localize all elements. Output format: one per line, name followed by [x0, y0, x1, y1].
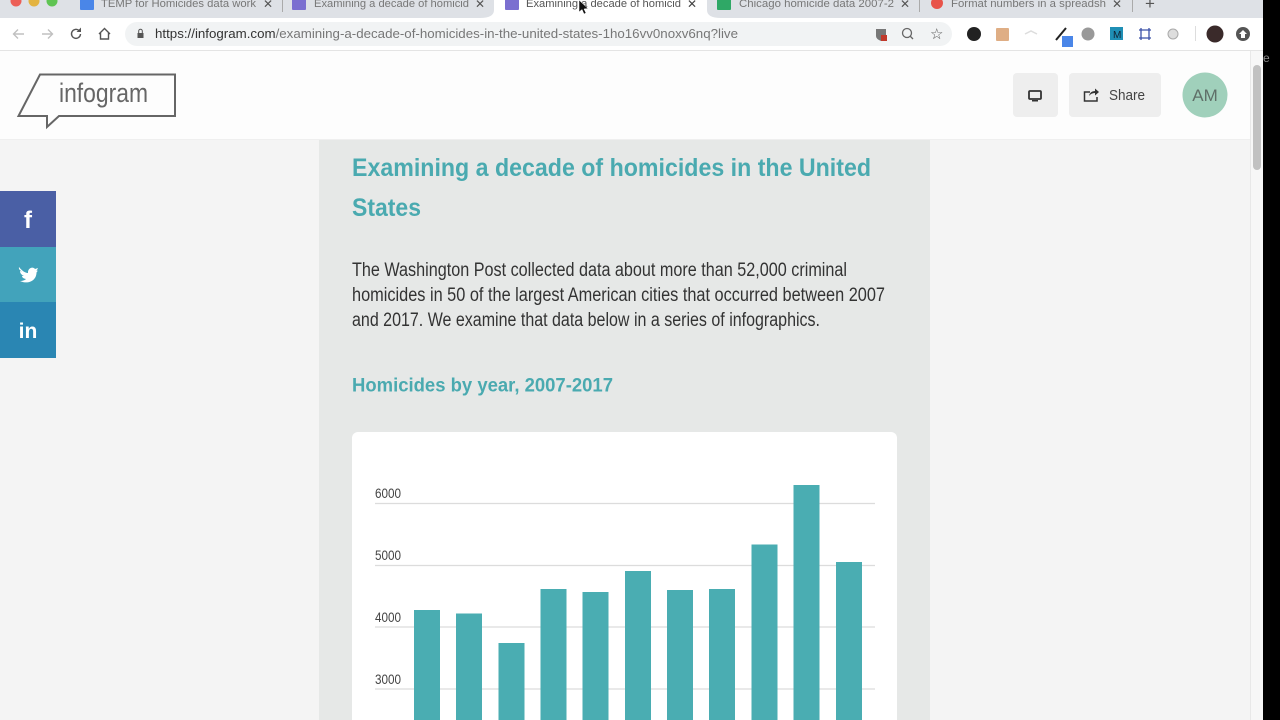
button: twitter	[0, 247, 56, 302]
infogram logo: infogram	[59, 78, 148, 108]
screen edge outside browser	[1263, 0, 1280, 720]
page header bar	[0, 51, 1250, 139]
browser toolbar: M	[1113, 30, 1121, 41]
social share buttons	[0, 191, 56, 358]
button: share	[1069, 73, 1161, 117]
browser toolbar: https://infogram.com /examining-a-decade-of-homicides-in-the-united-states-1ho16vv0noxv6nq?live	[155, 27, 738, 41]
title: Examining a decade of homicides in the United	[352, 154, 871, 182]
chart heading: Homicides by year, 2007-2017	[352, 376, 613, 396]
y axis gridlines	[375, 504, 875, 689]
button: present	[1013, 73, 1058, 117]
mouse cursor	[579, 0, 588, 14]
y axis labels: 3000	[375, 671, 401, 687]
button: facebook	[0, 191, 56, 247]
bars	[414, 485, 862, 720]
title: States	[352, 194, 421, 222]
screen edge outside browser: e	[1263, 51, 1270, 65]
y axis labels: 4000	[375, 609, 401, 625]
button: linkedin	[0, 302, 56, 358]
bar chart card	[352, 432, 897, 720]
button: linkedin: in	[19, 320, 37, 343]
button: share: Share	[1109, 87, 1145, 104]
intro paragraph: The Washington Post collected data about more than 52,000 criminal	[352, 260, 847, 281]
infogram logo	[18, 74, 175, 127]
browser toolbar	[0, 18, 1263, 51]
intro paragraph: and 2017. We examine that data below in a series of infographics.	[352, 310, 820, 331]
user avatar: AM	[1192, 86, 1218, 105]
y axis labels: 6000	[375, 485, 401, 501]
user avatar	[1182, 72, 1228, 118]
scrollbar	[1250, 51, 1263, 720]
y axis labels: 5000	[375, 547, 401, 563]
intro paragraph: homicides in 50 of the largest American cities that occurred between 2007	[352, 285, 885, 306]
y axis labels	[375, 485, 401, 687]
browser tab strip	[0, 0, 1263, 18]
button: facebook: f	[24, 207, 33, 234]
content panel	[319, 140, 930, 720]
browser toolbar: ☆	[930, 26, 943, 43]
